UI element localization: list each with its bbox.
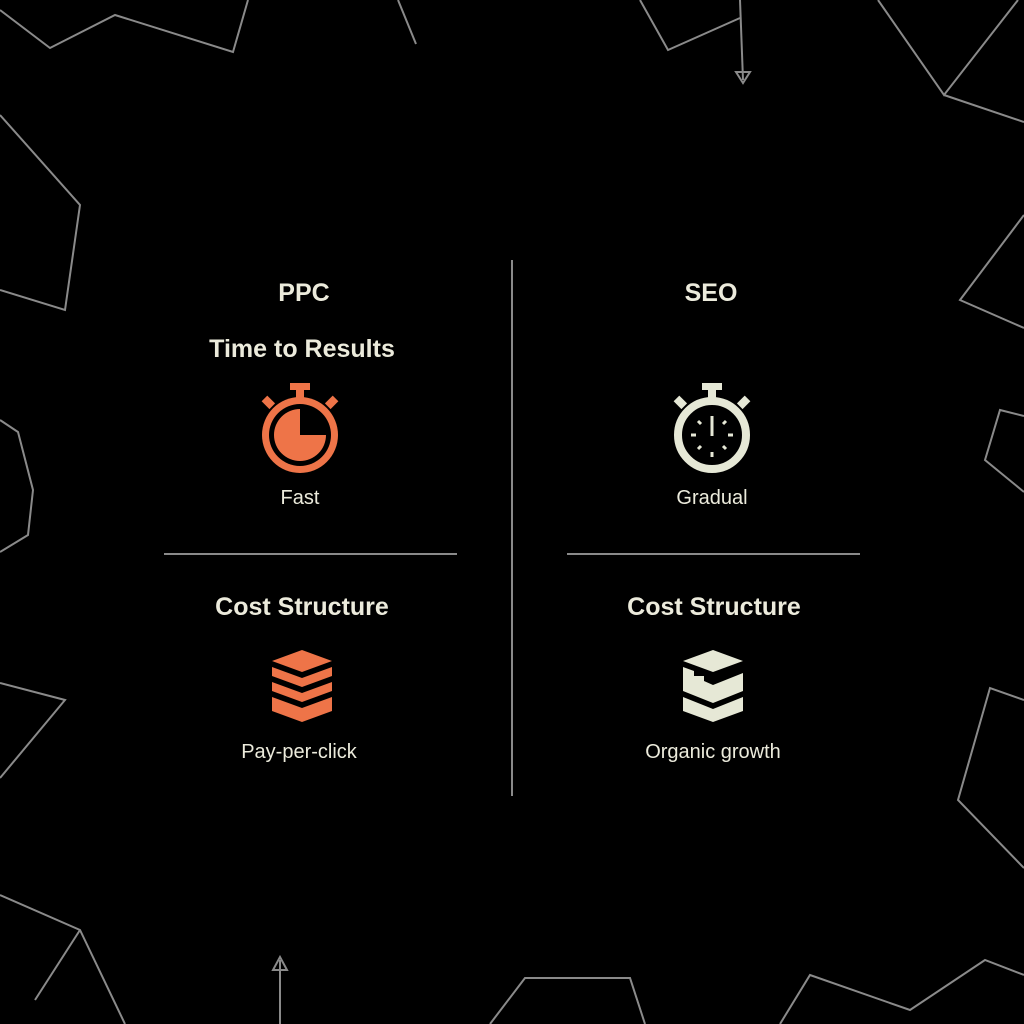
label: Organic growth: Organic growth	[645, 741, 781, 763]
icon: cream stack	[683, 650, 743, 722]
panel: SEO	[567, 279, 860, 763]
divider	[567, 553, 860, 555]
icon: cream stopwatch	[674, 383, 750, 473]
panel: PPC	[164, 279, 457, 763]
label: Fast: Fast	[281, 487, 319, 509]
divider	[164, 553, 457, 555]
heading: Cost Structure: Cost Structure	[215, 593, 389, 621]
icon: orange stack	[272, 650, 332, 722]
label: Pay-per-click: Pay-per-click	[241, 741, 357, 763]
heading: Time to Results: Time to Results	[209, 335, 395, 363]
heading: PPC: PPC	[278, 279, 330, 307]
vertical divider	[511, 260, 513, 796]
icon: orange stopwatch	[262, 383, 338, 473]
label: Gradual: Gradual	[676, 487, 748, 509]
heading: Cost Structure: Cost Structure	[627, 593, 801, 621]
heading: SEO: SEO	[685, 279, 737, 307]
